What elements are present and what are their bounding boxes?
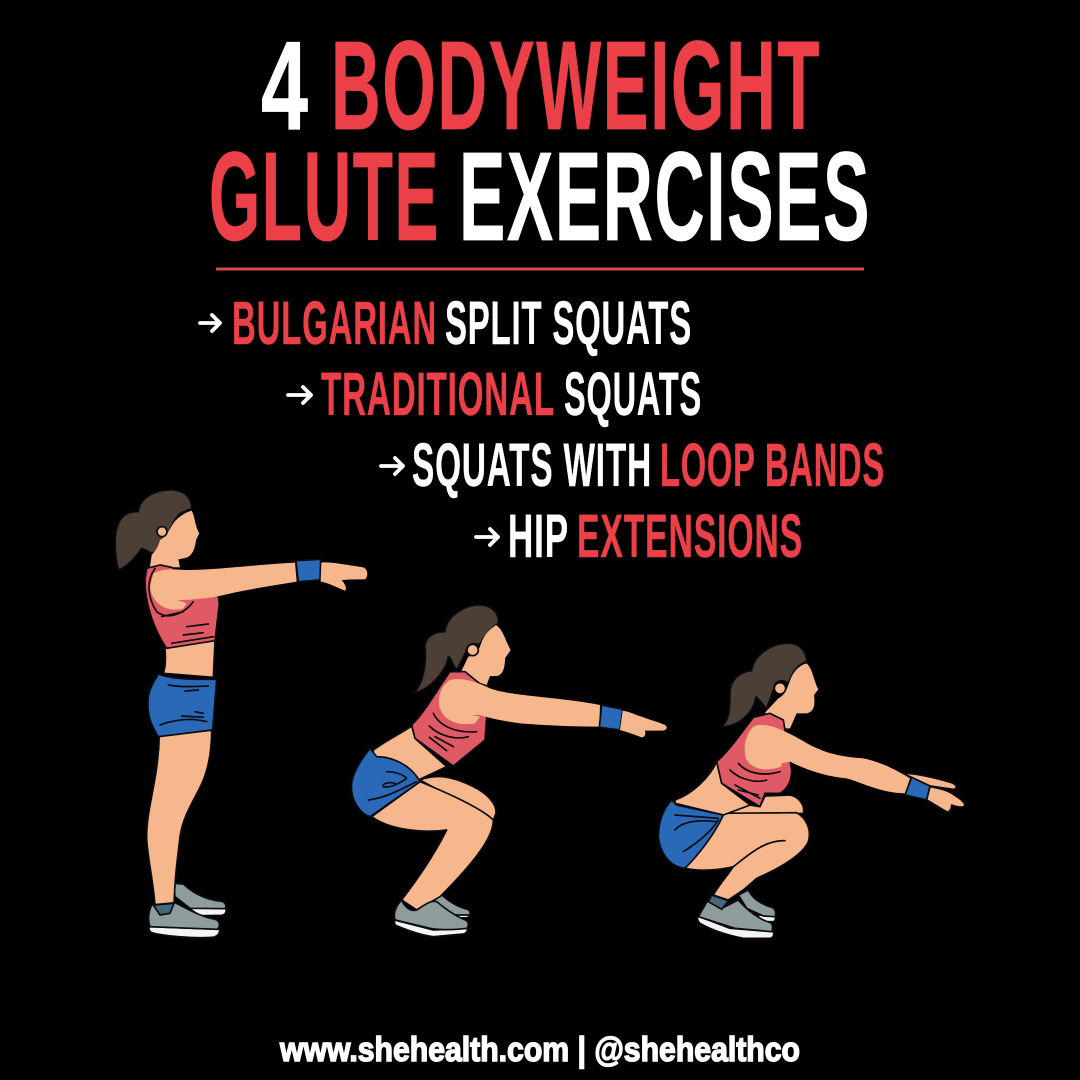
shorts [148, 674, 217, 737]
item: Squats with loop bands: LOOP BANDS [660, 431, 885, 499]
title: GLUTE [209, 126, 440, 267]
item: Traditional squats: TRADITIONAL [321, 360, 555, 428]
upper hand [903, 773, 956, 789]
front shoe [697, 895, 774, 938]
item: Bulgarian split squats: BULGARIAN [232, 289, 437, 357]
figure: woman in half squat [351, 605, 667, 937]
head [462, 625, 511, 685]
front leg [372, 782, 493, 910]
back thigh [723, 795, 804, 815]
ear [467, 644, 478, 656]
crop top [717, 713, 792, 807]
arm [439, 679, 600, 727]
hand [620, 711, 667, 737]
arm [745, 725, 910, 793]
ear [774, 683, 786, 694]
hair [414, 605, 498, 693]
head [765, 663, 818, 728]
figure: standing woman with arms forward [115, 490, 367, 938]
front leg [685, 813, 809, 900]
hair [115, 490, 192, 570]
title [209, 15, 871, 267]
footer website and handle: www.shehealth.com | @shehealthco [279, 1031, 800, 1069]
wristband [296, 559, 321, 582]
lower hand [927, 787, 965, 812]
figure: woman in deep squat [658, 643, 965, 938]
back shoe [430, 892, 470, 918]
midriff [373, 726, 447, 780]
item: Hip extensions: EXTENSIONS [577, 502, 803, 570]
front shoe [394, 900, 468, 937]
arm [150, 563, 297, 610]
title: 4 [261, 15, 310, 156]
title divider [216, 268, 864, 270]
item: Hip extensions: HIP [508, 502, 569, 570]
exercise list [200, 289, 885, 570]
leg [147, 730, 212, 906]
midriff [675, 762, 750, 815]
midriff [163, 641, 215, 677]
item: Traditional squats: SQUATS [564, 360, 702, 428]
crop top [412, 672, 487, 766]
front shoe [149, 903, 220, 938]
head [150, 511, 199, 567]
item: Hip extensions [476, 502, 803, 570]
hair [722, 643, 807, 727]
shorts [658, 800, 723, 868]
crop top [145, 565, 219, 648]
ear [157, 527, 167, 537]
shorts [351, 748, 420, 817]
item: Squats with loop bands: SQUATS WITH [412, 431, 652, 499]
wristband [599, 705, 623, 730]
back shoe [738, 890, 776, 922]
item: Bulgarian split squats: SPLIT SQUATS [445, 289, 692, 357]
hand [321, 562, 367, 591]
wristband [905, 777, 930, 800]
back thigh [420, 777, 496, 820]
back shoe [173, 883, 226, 916]
